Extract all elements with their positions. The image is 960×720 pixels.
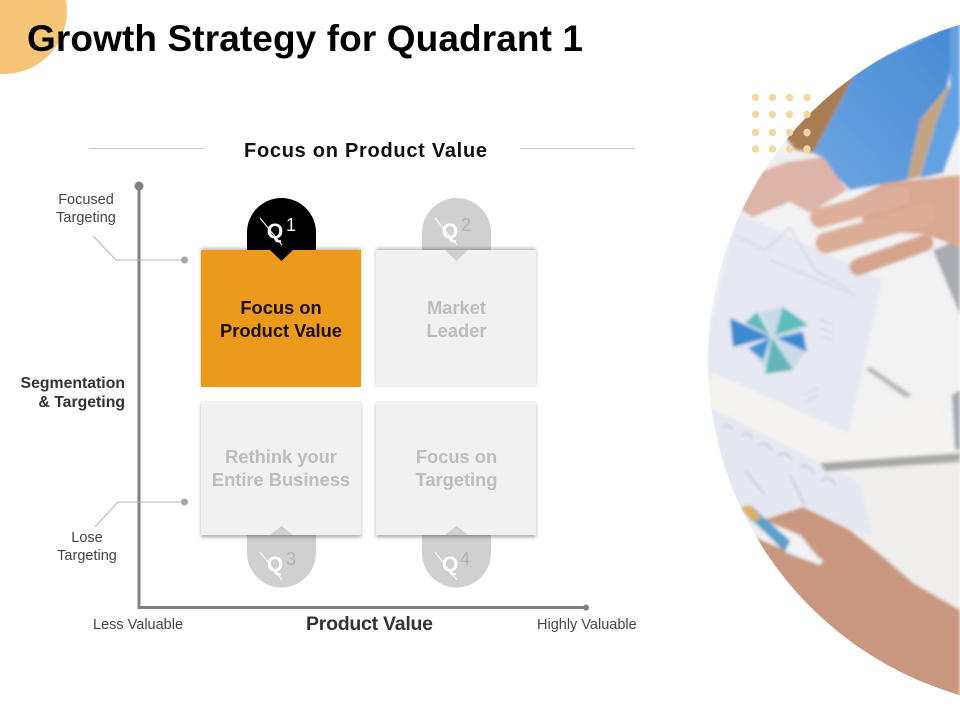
label: focused targeting	[56, 192, 188, 264]
tab Q2: 2	[461, 215, 471, 235]
notebook, pen and second paper	[713, 374, 775, 402]
pie chart in photo	[730, 307, 808, 374]
label: lose targeting: Targeting	[57, 548, 117, 564]
lower hand with pen	[756, 506, 960, 696]
panel Q1: focus on product value: Product Value	[220, 320, 342, 341]
left hand holding paper	[740, 157, 847, 217]
pointer Q4	[445, 526, 468, 535]
fingers	[820, 196, 925, 267]
x-axis labels	[93, 613, 637, 635]
tab Q1 active: Q	[267, 220, 283, 243]
tab Q3	[247, 535, 316, 587]
label: focused targeting: Focused	[58, 192, 114, 208]
blue sleeve	[813, 22, 960, 190]
x-axis labels: Less Valuable	[93, 617, 183, 633]
tab Q3: Q	[267, 553, 283, 576]
panel Q3: rethink your entire business	[201, 401, 361, 535]
tab Q3: 3	[286, 549, 296, 569]
first paper	[700, 212, 882, 433]
beige background between sleeve and collar	[907, 87, 950, 180]
pointer Q2	[445, 250, 468, 261]
panel Q2: market leader: Market	[427, 297, 486, 318]
panel Q1: focus on product value: Focus on	[240, 297, 322, 318]
tab Q4: 4	[460, 549, 470, 569]
tab Q2	[422, 198, 491, 250]
grey shirt	[933, 240, 960, 315]
photo: hands reviewing charts in circular crop	[700, 0, 960, 720]
decorative orange corner circle	[0, 0, 67, 74]
y-axis label: & Targeting	[38, 394, 125, 411]
chart axes	[134, 182, 589, 610]
panel Q1: focus on product value	[201, 250, 361, 387]
x-axis labels: Highly Valuable	[537, 617, 637, 633]
label: lose targeting: Lose	[71, 530, 103, 546]
tab Q4: Q	[442, 553, 458, 576]
brown wedge behind sleeve	[786, 75, 856, 155]
panel Q4: focus on targeting: Focus on	[416, 446, 497, 467]
label: focused targeting: Targeting	[56, 210, 116, 226]
tab Q1 active	[247, 198, 316, 261]
x-axis labels: Product Value	[306, 613, 433, 635]
right palm	[850, 175, 960, 248]
blue collar strip	[920, 22, 960, 178]
panel Q3: rethink your entire business: Entire Business	[212, 469, 350, 490]
panel Q2: market leader	[376, 250, 536, 387]
panel Q2: market leader: Leader	[427, 320, 486, 341]
decorative dot grid	[752, 94, 811, 153]
white area by left hand	[814, 152, 822, 160]
pointer Q3	[270, 526, 293, 535]
tab Q2: Q	[442, 220, 458, 243]
panel Q4: focus on targeting: Targeting	[416, 469, 497, 490]
y-axis label: Segmentation	[21, 375, 125, 392]
section heading with rules: Focus on Product Value	[244, 140, 487, 162]
tab Q4	[422, 535, 491, 588]
label: lose targeting	[57, 498, 188, 564]
panel Q4: focus on targeting	[376, 401, 536, 535]
panel Q3: rethink your entire business: Rethink your	[225, 446, 337, 467]
title: Growth Strategy for Quadrant 1	[27, 18, 583, 59]
tab Q1 active: 1	[286, 215, 296, 235]
